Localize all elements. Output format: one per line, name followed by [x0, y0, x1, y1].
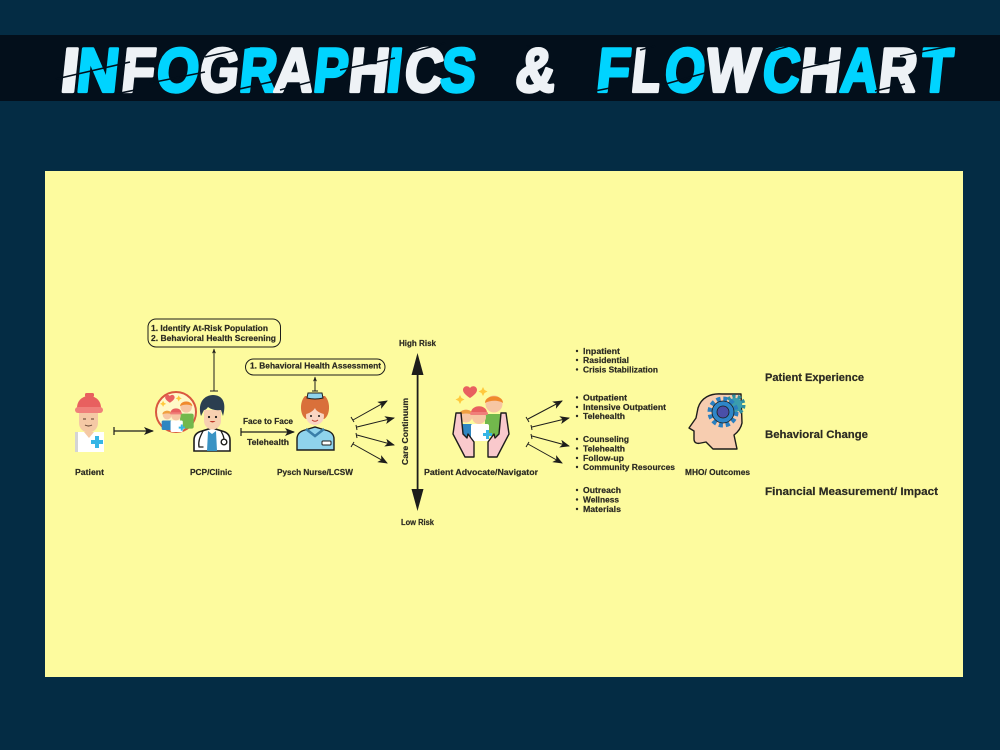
list: outreach services: Materials	[583, 504, 621, 514]
title: Infographics & Flowchart: C	[760, 37, 804, 105]
label: Face to Face: Face to Face	[243, 416, 293, 426]
callout: behavioral health assessment	[246, 359, 385, 375]
icon: patient	[75, 393, 104, 452]
arrows: navigator fan-out	[526, 401, 569, 463]
title: Infographics & Flowchart: R	[876, 37, 921, 105]
label: PCP/Clinic: PCP/Clinic	[190, 467, 232, 477]
list: counseling services	[576, 434, 675, 472]
list: inpatient services: Crisis Stabilization	[583, 364, 658, 374]
callout: at-risk and screening: 1. Identify At-Risk Population	[151, 323, 268, 333]
title: Infographics & Flowchart: I	[58, 37, 83, 105]
icon: family circle	[156, 392, 196, 432]
icon: head with gears	[689, 394, 743, 449]
callout: behavioral health assessment: 1. Behavioral Health Assessment	[250, 360, 381, 370]
list: outpatient services	[576, 392, 666, 421]
title: Infographics & Flowchart: G	[197, 37, 243, 105]
list: outpatient services: Outpatient	[583, 392, 627, 402]
title: Infographics & Flowchart: R	[237, 37, 281, 105]
title: Infographics & Flowchart: I	[384, 37, 406, 105]
title: Infographics & Flowchart: W	[703, 37, 763, 105]
label: Patient: Patient	[75, 467, 104, 477]
title: Infographics & Flowchart: O	[154, 37, 203, 105]
title: Infographics & Flowchart: A	[838, 37, 883, 105]
outcome: financial measurement: Financial Measurement/ Impact	[765, 486, 938, 498]
arrow: risk scale	[412, 353, 424, 511]
title: Infographics & Flowchart: F	[594, 37, 634, 105]
list: counseling services: Counseling	[583, 434, 629, 444]
arrows: nurse fan-out	[351, 401, 394, 463]
arrow: clinic to nurse	[241, 428, 294, 436]
title: Infographics & Flowchart: H	[346, 37, 393, 105]
icon: family in hands	[453, 386, 509, 457]
title: Infographics & Flowchart: P	[311, 37, 352, 105]
list: outreach services: Wellness	[583, 494, 619, 504]
icon: doctor	[194, 395, 230, 451]
title: Infographics & Flowchart: L	[629, 37, 665, 105]
label: Patient Advocate/Navigator: Patient Advocate/Navigator	[424, 467, 539, 477]
callout: at-risk and screening	[148, 319, 280, 347]
list: inpatient services: Inpatient	[583, 346, 620, 356]
title slash cuts	[56, 43, 951, 94]
label: High Risk: High Risk	[399, 338, 436, 348]
panel: yellow flowchart canvas	[45, 171, 963, 677]
title: Infographics & Flowchart: H	[797, 37, 845, 105]
list: counseling services: Follow-up	[583, 453, 624, 463]
list: outreach services: Outreach	[583, 485, 621, 495]
label: Telehealth: Telehealth	[247, 437, 289, 447]
title: Infographics & Flowchart: F	[119, 37, 159, 105]
list: counseling services: Community Resources	[583, 462, 675, 472]
outcome: behavioral change: Behavioral Change	[765, 429, 868, 441]
arrow: PCP to screening box	[210, 349, 218, 391]
title: Infographics & Flowchart: T	[918, 37, 956, 105]
title: Infographics & Flowchart: C	[402, 37, 447, 105]
list: counseling services: Telehealth	[583, 444, 625, 454]
label: MHO/ Outcomes: MHO/ Outcomes	[685, 467, 750, 477]
outcome: patient experience: Patient Experience	[765, 372, 864, 384]
label: Pysch Nurse/LCSW: Pysch Nurse/LCSW	[277, 467, 354, 477]
icon: nurse	[297, 393, 334, 450]
callout: at-risk and screening: 2. Behavioral Health Screening	[151, 333, 276, 343]
title: Infographics & Flowchart: S	[438, 37, 480, 105]
title: Infographics & Flowchart: N	[74, 37, 123, 105]
list: inpatient services: Rasidential	[583, 355, 629, 365]
title: Infographics & Flowchart: A	[272, 37, 318, 105]
label: Low Risk: Low Risk	[401, 517, 434, 527]
title: Infographics & Flowchart: &	[513, 37, 560, 105]
title: Infographics & Flowchart: O	[662, 37, 709, 105]
list: inpatient services	[576, 346, 658, 374]
arrow: patient to PCP	[114, 427, 153, 435]
title: Infographics & Flowchart	[58, 37, 956, 105]
label: Care Continuum: Care Continuum	[400, 398, 410, 465]
list: outreach services	[576, 485, 621, 514]
arrow: nurse to assessment box	[312, 377, 318, 391]
list: outpatient services: Intensive Outpatient	[583, 402, 666, 412]
list: outpatient services: Telehealth	[583, 411, 625, 421]
title band	[0, 35, 1000, 101]
